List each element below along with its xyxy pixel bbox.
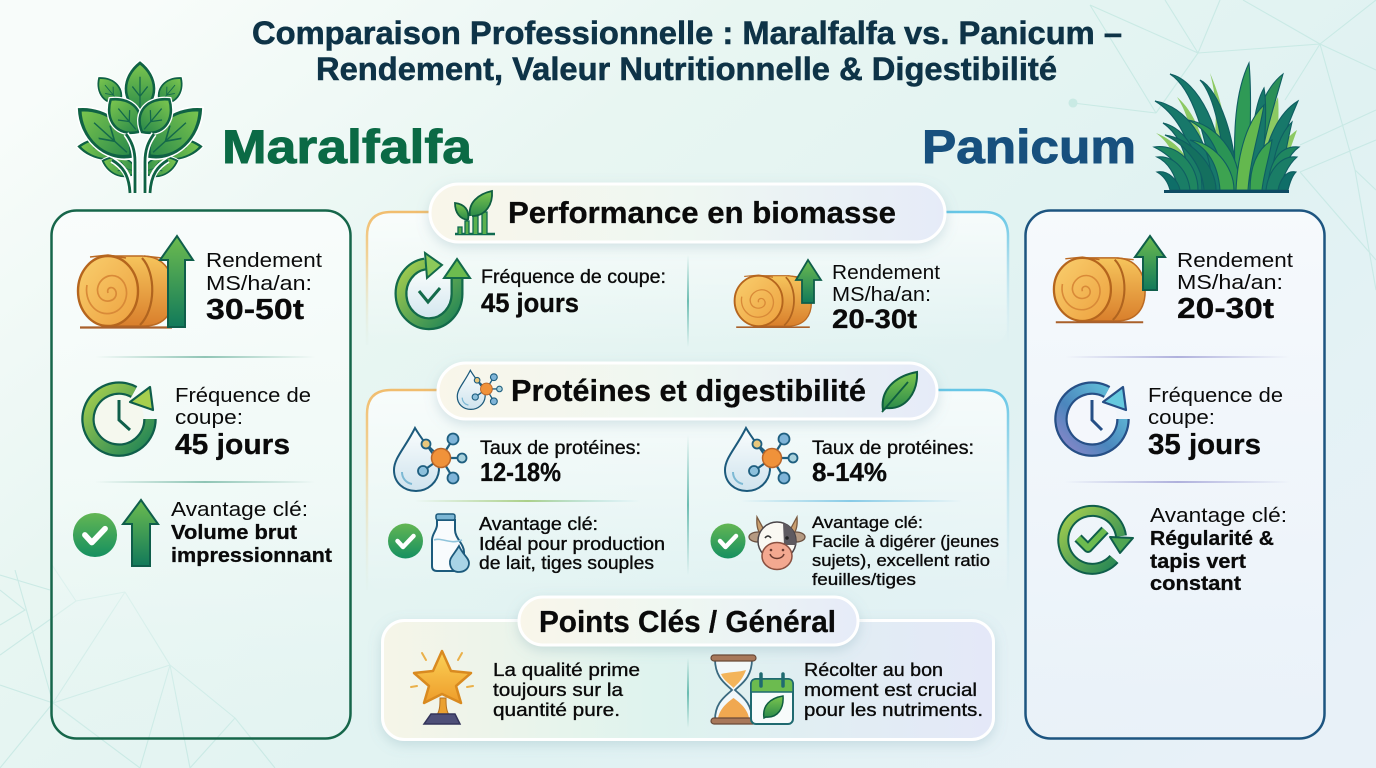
text: avantage digerer: feuilles/tiges xyxy=(812,570,916,589)
text: frequence 35 jours: Fréquence de xyxy=(1148,384,1283,407)
text: rendement 30-50t: Rendement xyxy=(206,249,322,272)
text: avantage cle regularite: constant xyxy=(1150,572,1241,595)
icon: maralfalfa plant xyxy=(69,63,211,193)
text: recolter xyxy=(804,659,983,720)
text: qualite: quantité pure. xyxy=(493,699,620,720)
text: avantage cle volume: Avantage clé: xyxy=(171,498,308,521)
text: taux 12-18% xyxy=(480,438,641,487)
text: recolter: Récolter au bon xyxy=(804,659,943,680)
icon: hay bale with up arrow xyxy=(735,260,821,327)
text: qualite: La qualité prime xyxy=(493,659,640,680)
icon: check xyxy=(73,513,117,557)
heading text: Protéines et digestibilité xyxy=(511,373,866,408)
text: taux 12-18%: 12-18% xyxy=(480,457,561,487)
title: Rendement, Valeur Nutritionnelle & Digestibilité xyxy=(316,51,1057,87)
text: rendement 20-30t: 20-30t xyxy=(1177,293,1274,325)
text: avantage cle volume: impressionnant xyxy=(171,544,332,567)
panel: Panicum xyxy=(1026,210,1324,738)
text: avantage cle volume: Volume brut xyxy=(171,521,297,544)
icon: cycle clock with arrow xyxy=(401,253,470,324)
text: avantage digerer: Facile à digérer (jeunes xyxy=(812,532,999,551)
icon: clock cycle xyxy=(88,387,153,450)
icon: star trophy xyxy=(411,651,473,724)
text: frequence 45 jours: 45 jours xyxy=(481,288,579,318)
text: rendement 20-30t: 20-30t xyxy=(832,304,917,334)
icon: check left xyxy=(388,524,423,558)
text: qualite xyxy=(493,659,640,720)
text: avantage lait xyxy=(479,514,665,573)
text: avantage lait: Idéal pour production xyxy=(479,534,665,554)
text: avantage digerer: Avantage clé: xyxy=(812,513,923,532)
heading pill xyxy=(438,363,937,419)
text: rendement 20-30t xyxy=(1177,249,1293,325)
icon: hourglass xyxy=(711,655,756,724)
text: frequence 35 jours: coupe: xyxy=(1148,406,1215,429)
icon: protein molecule left xyxy=(394,428,466,491)
panel: Maralfalfa xyxy=(52,210,350,738)
icon: clock cycle xyxy=(1061,387,1126,450)
text: avantage lait: de lait, tiges souples xyxy=(479,553,654,573)
text: rendement 20-30t: Rendement xyxy=(1177,249,1293,272)
text: taux 8-14%: Taux de protéines: xyxy=(812,438,974,459)
text: avantage lait: Avantage clé: xyxy=(479,514,598,534)
text: frequence 45 jours xyxy=(481,267,666,318)
heading pill xyxy=(430,184,945,242)
text: avantage digerer: sujets), excellent ratio xyxy=(812,551,990,570)
heading: Maralfalfa: Maralfalfa xyxy=(222,120,473,173)
text: avantage cle regularite xyxy=(1150,504,1287,595)
text: recolter: pour les nutriments. xyxy=(804,699,983,720)
icon: sprout chart xyxy=(455,191,495,234)
panel: Proteines et digestibilite xyxy=(367,363,1008,595)
text: avantage cle regularite: Régularité & xyxy=(1150,527,1274,550)
text: qualite: toujours sur la xyxy=(493,679,624,700)
text: frequence 45 jours: Fréquence de xyxy=(175,384,311,407)
icon: panicum grass xyxy=(1154,63,1299,193)
text: rendement 20-30t: Rendement xyxy=(832,262,940,284)
icon: hay bale with up arrow xyxy=(78,236,193,328)
panel: Points Cles xyxy=(382,597,994,740)
icon: calendar leaf xyxy=(751,674,793,724)
icon: protein molecule xyxy=(457,370,502,409)
title: Comparaison Professionnelle : Maralfalfa vs. Panicum – xyxy=(252,15,1122,51)
text: avantage digerer xyxy=(812,513,999,589)
text: rendement 20-30t xyxy=(832,262,940,334)
icon: cow xyxy=(749,517,805,570)
text: frequence 45 jours: 45 jours xyxy=(175,429,290,461)
text: frequence 35 jours: 35 jours xyxy=(1148,429,1261,461)
text: avantage cle regularite: Avantage clé: xyxy=(1150,504,1287,527)
text: recolter: moment est crucial xyxy=(804,679,977,700)
text: frequence 45 jours xyxy=(175,384,311,461)
text: rendement 30-50t xyxy=(206,249,322,326)
text: taux 8-14% xyxy=(812,438,974,487)
heading pill xyxy=(519,597,858,645)
text: avantage cle regularite: tapis vert xyxy=(1150,550,1246,573)
text: rendement 20-30t: MS/ha/an: xyxy=(832,284,931,306)
text: frequence 45 jours: Fréquence de coupe: xyxy=(481,267,666,288)
heading text: Performance en biomasse xyxy=(508,195,896,230)
title xyxy=(252,15,1122,87)
text: taux 12-18%: Taux de protéines: xyxy=(480,438,641,459)
heading: Panicum: Panicum xyxy=(922,120,1136,173)
icon: check right xyxy=(710,524,746,558)
text: rendement 20-30t: MS/ha/an: xyxy=(1177,271,1283,294)
heading text: Points Clés / Général xyxy=(539,604,836,639)
text: frequence 45 jours: coupe: xyxy=(175,406,243,429)
panel: Performance en biomasse xyxy=(367,184,1008,347)
text: frequence 35 jours xyxy=(1148,384,1283,461)
text: taux 8-14%: 8-14% xyxy=(812,457,887,487)
icon: protein molecule right xyxy=(725,428,798,491)
icon: cycle check xyxy=(1063,511,1133,569)
icon: leaf xyxy=(882,372,917,412)
text: rendement 30-50t: 30-50t xyxy=(206,294,304,326)
text: rendement 30-50t: MS/ha/an: xyxy=(206,272,312,295)
icon: milk bottle xyxy=(432,514,469,572)
icon: hay bale with up arrow xyxy=(1054,236,1165,322)
text: avantage cle volume xyxy=(171,498,332,567)
icon: up arrow xyxy=(123,500,158,566)
